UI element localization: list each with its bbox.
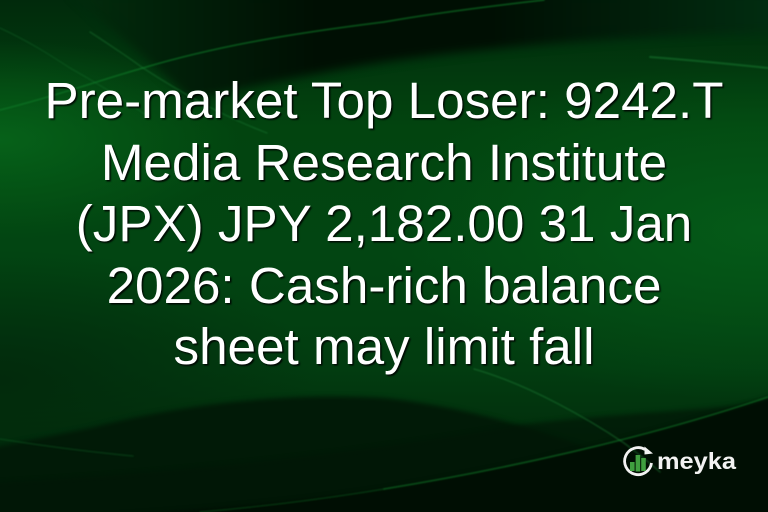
- title: Pre-market Top Loser: 9242.T: [44, 72, 724, 129]
- title: sheet may limit fall: [174, 318, 594, 375]
- icon: circular arrow with bars: [625, 446, 653, 475]
- title: Media Research Institute: [101, 134, 667, 190]
- wordmark: meyka: [657, 448, 736, 474]
- title: (JPX) JPY 2,182.00 31 Jan: [76, 195, 692, 252]
- title: 2026: Cash-rich balance: [107, 256, 661, 314]
- logo: meyka: [623, 446, 736, 476]
- title: [44, 72, 724, 376]
